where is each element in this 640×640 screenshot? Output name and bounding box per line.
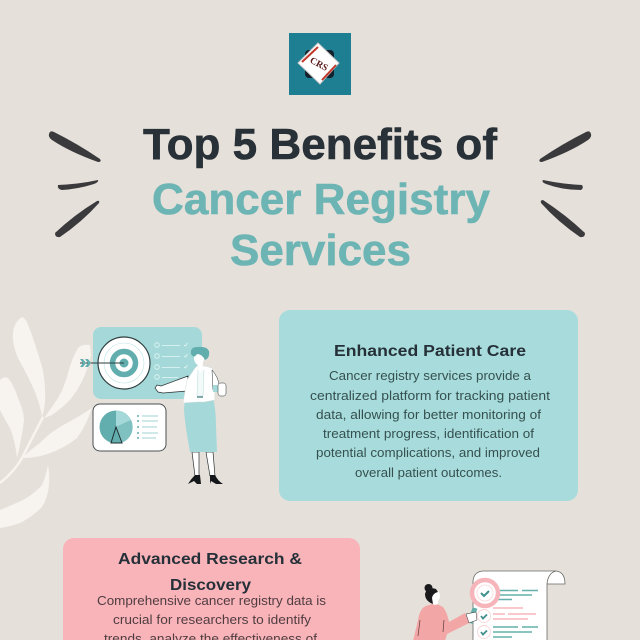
heading: Discovery [170, 577, 251, 594]
burst marks: left [49, 131, 101, 237]
body text: Cancer registry services provide a [329, 369, 531, 383]
decorative leaf branch [0, 317, 92, 528]
neck and face [197, 362, 203, 372]
stem [0, 417, 43, 483]
hand [466, 612, 477, 623]
hair [424, 584, 432, 592]
left leaf [0, 377, 24, 458]
burst marks: right [539, 131, 591, 237]
body text: data, allowing for better monitoring of [316, 408, 542, 422]
illustration: target and chart presenter [80, 327, 226, 484]
logo: CRS [308, 56, 329, 74]
logo [289, 33, 351, 95]
body text: potential complications, and improved [316, 446, 540, 460]
shoes [188, 475, 223, 484]
top leaf [13, 317, 45, 417]
neck and face [430, 597, 438, 605]
pie chart card [93, 404, 166, 451]
title: Services [230, 226, 411, 275]
title: Top 5 Benefits of [143, 120, 497, 169]
lower right leaf [22, 408, 92, 458]
title: Cancer Registry [152, 175, 491, 224]
heading: Enhanced Patient Care [334, 343, 526, 360]
skirt [184, 397, 217, 452]
scroll [547, 571, 565, 584]
panel: Advanced Research and Discovery [63, 538, 360, 640]
body text: centralized platform for tracking patient [310, 389, 551, 403]
right arm and cup [212, 370, 219, 390]
legs [192, 452, 215, 476]
jacket [183, 366, 215, 403]
woman with magnifier [413, 584, 477, 640]
magnifier [470, 580, 498, 623]
left arm [155, 376, 188, 393]
target board [80, 327, 202, 399]
body text: Comprehensive cancer registry data is [97, 594, 326, 608]
body text: crucial for researchers to identify [113, 613, 312, 627]
body text: overall patient outcomes. [355, 466, 502, 480]
hair [191, 347, 209, 360]
body text: treatment progress, identification of [323, 427, 535, 441]
upper right leaf [44, 345, 91, 418]
title [143, 120, 497, 275]
heading [118, 551, 302, 594]
woman presenting [155, 347, 226, 484]
bottom leaf [0, 465, 49, 528]
body text [97, 594, 326, 640]
body text [310, 369, 551, 480]
panel: Enhanced Patient Care [279, 310, 578, 501]
checklist lines [478, 590, 538, 638]
illustration: checklist scroll with magnifier [413, 571, 565, 640]
heading: Advanced Research & [118, 551, 302, 568]
